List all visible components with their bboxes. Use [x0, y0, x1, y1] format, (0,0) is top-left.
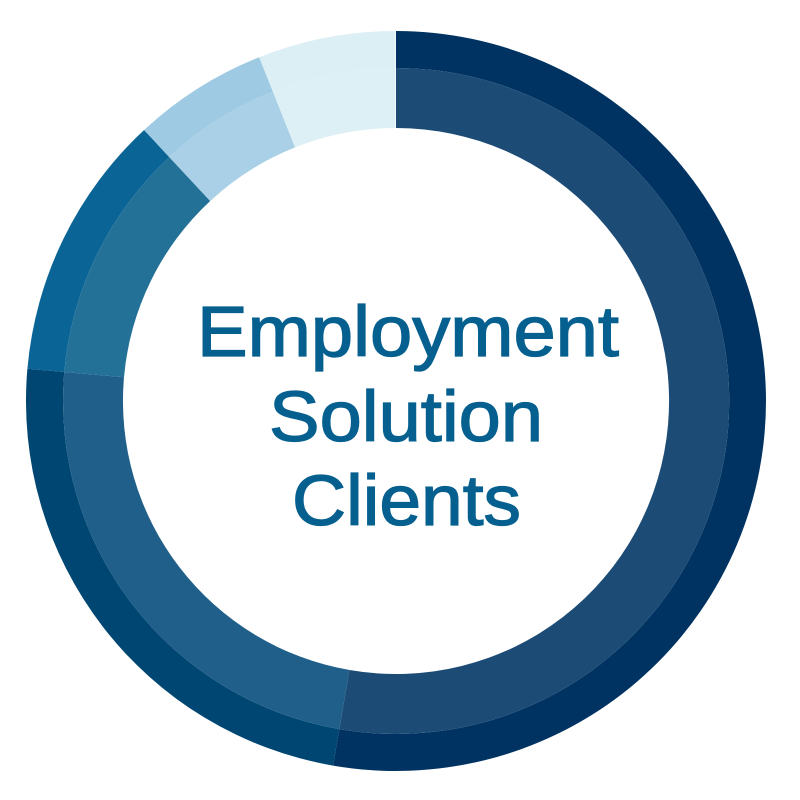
- segment 4: light blue: [144, 57, 295, 201]
- center title: Clients: [292, 462, 521, 541]
- center title: Employment: [197, 293, 619, 372]
- segment 1: largest, navy: [333, 31, 766, 771]
- segment 3: medium blue: [27, 130, 210, 377]
- segment 2: dark blue: [26, 369, 350, 766]
- center title: Solution: [269, 378, 543, 457]
- center title: [197, 293, 619, 541]
- segment 5: palest blue: [259, 31, 395, 147]
